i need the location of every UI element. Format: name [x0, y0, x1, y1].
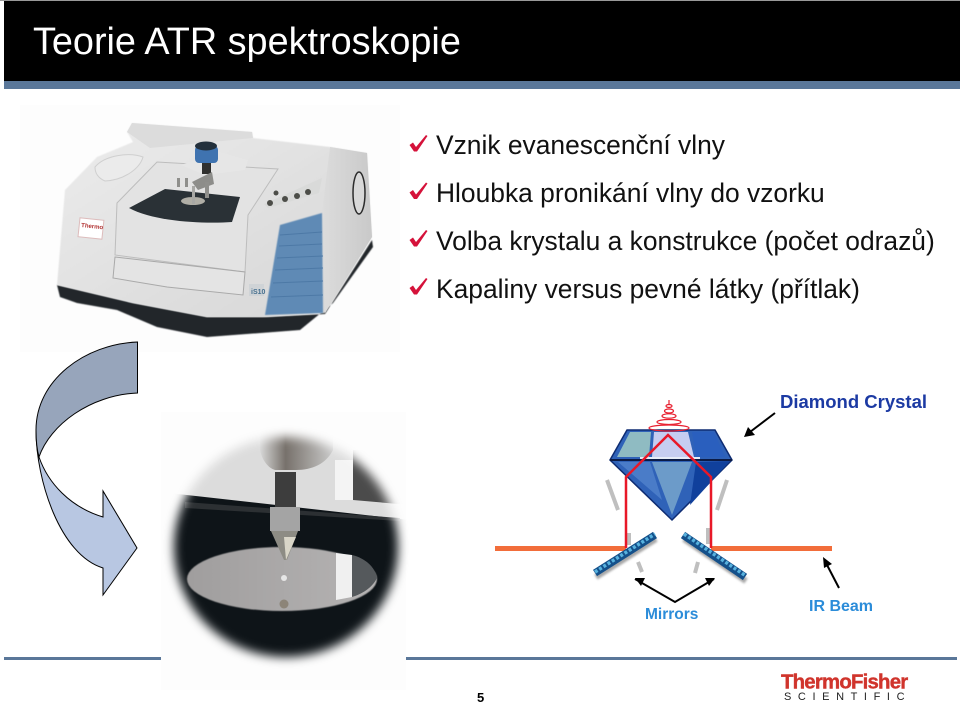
label: Diamond Crystal: Diamond Crystal	[780, 391, 927, 412]
right mirror	[683, 534, 746, 581]
bullet 3: Volba krystalu a konstrukce (počet odrazů)	[436, 226, 935, 256]
top lid	[127, 123, 253, 148]
dark base	[57, 240, 373, 337]
header bar	[0, 0, 960, 89]
blue panel	[265, 213, 323, 315]
drawer	[113, 257, 245, 295]
arrows: mirrors	[635, 578, 715, 602]
badge	[78, 218, 104, 239]
bullet 2: Hloubka pronikání vlny do vzorku	[436, 178, 825, 208]
badge: Thermo	[81, 223, 104, 231]
diamond crystal	[610, 430, 732, 520]
bullet 4: Kapaliny versus pevné látky (přítlak)	[436, 274, 860, 304]
evanescent wave	[649, 400, 689, 431]
label: Mirrors: Mirrors	[645, 606, 698, 623]
mirror shadows	[607, 480, 727, 573]
photo: FTIR spectrometer: iS10	[251, 289, 266, 296]
diagram: diamond ATR	[495, 391, 927, 623]
sample well	[95, 155, 143, 181]
side dial	[353, 172, 365, 214]
instrument body	[57, 123, 372, 317]
logo: Thermo Fisher Scientific	[781, 672, 911, 703]
red light path	[626, 435, 711, 548]
photo: crystal tip close-up	[161, 429, 406, 666]
title: Teorie ATR spektroskopie	[33, 21, 461, 63]
arrow: IR beam	[823, 557, 839, 588]
right side	[322, 147, 372, 313]
logo: Thermo Fisher Scientific: ThermoFisher	[781, 672, 908, 694]
door	[115, 162, 278, 272]
photo: FTIR spectrometer	[20, 105, 400, 352]
footer line	[4, 657, 957, 660]
IR beam	[495, 546, 832, 551]
sample drop	[281, 575, 287, 581]
label: IR Beam: IR Beam	[809, 598, 873, 615]
control panel	[264, 178, 322, 208]
sample disc	[187, 547, 377, 611]
bullet list	[410, 130, 935, 304]
logo: Thermo Fisher Scientific: SCIENTIFIC	[784, 691, 911, 703]
bullet 1: Vznik evanescenční vlny	[436, 130, 726, 160]
left mirror	[595, 534, 656, 577]
crystal tip	[275, 472, 296, 508]
pressure arm and knob	[181, 152, 248, 175]
arrow: diamond crystal	[744, 413, 775, 437]
sample tray	[129, 189, 240, 223]
curved arrow	[36, 342, 138, 595]
